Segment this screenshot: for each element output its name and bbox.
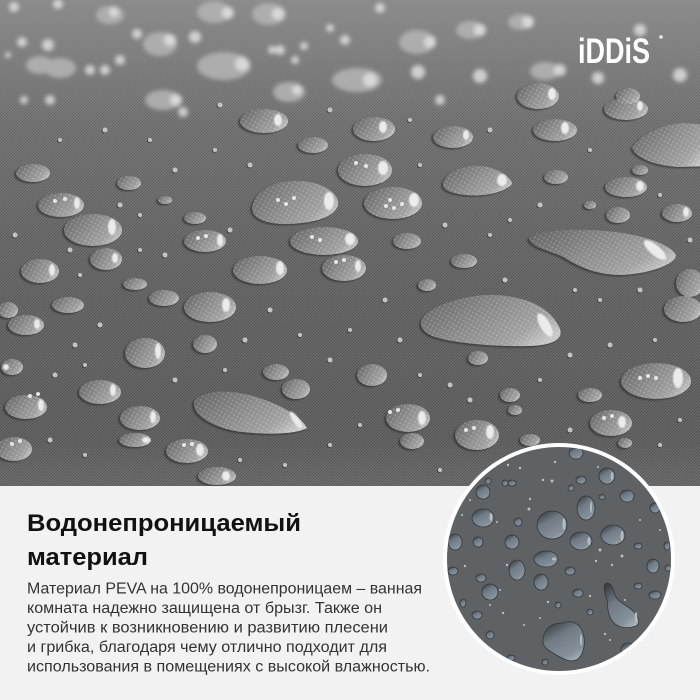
large drop — [543, 622, 584, 661]
teardrop — [604, 583, 639, 628]
body text: использования в помещениях с высокой влажностью. — [27, 658, 430, 676]
bottom text panel — [0, 486, 700, 700]
body text: и грибка, благодаря чему отлично подходит для — [27, 639, 387, 656]
heading — [27, 510, 301, 571]
body text: Материал PEVA на 100% водонепроницаем – ванная — [27, 580, 422, 598]
drop highlights — [562, 518, 566, 530]
water drops on fabric — [0, 83, 700, 486]
logo: iddis: iDDiS — [578, 32, 650, 71]
body text — [27, 580, 430, 676]
background: wet grey fabric photo — [0, 0, 700, 486]
blurred water drops at top — [5, 0, 687, 117]
body text: комната надежно защищена от брызг. Также он — [27, 600, 382, 617]
heading: материал — [27, 544, 148, 571]
heading: Водонепроницаемый — [27, 510, 301, 537]
circular close-up of droplets — [443, 443, 675, 675]
body text: устойчив к возникновению и развитию плесени — [27, 620, 388, 636]
